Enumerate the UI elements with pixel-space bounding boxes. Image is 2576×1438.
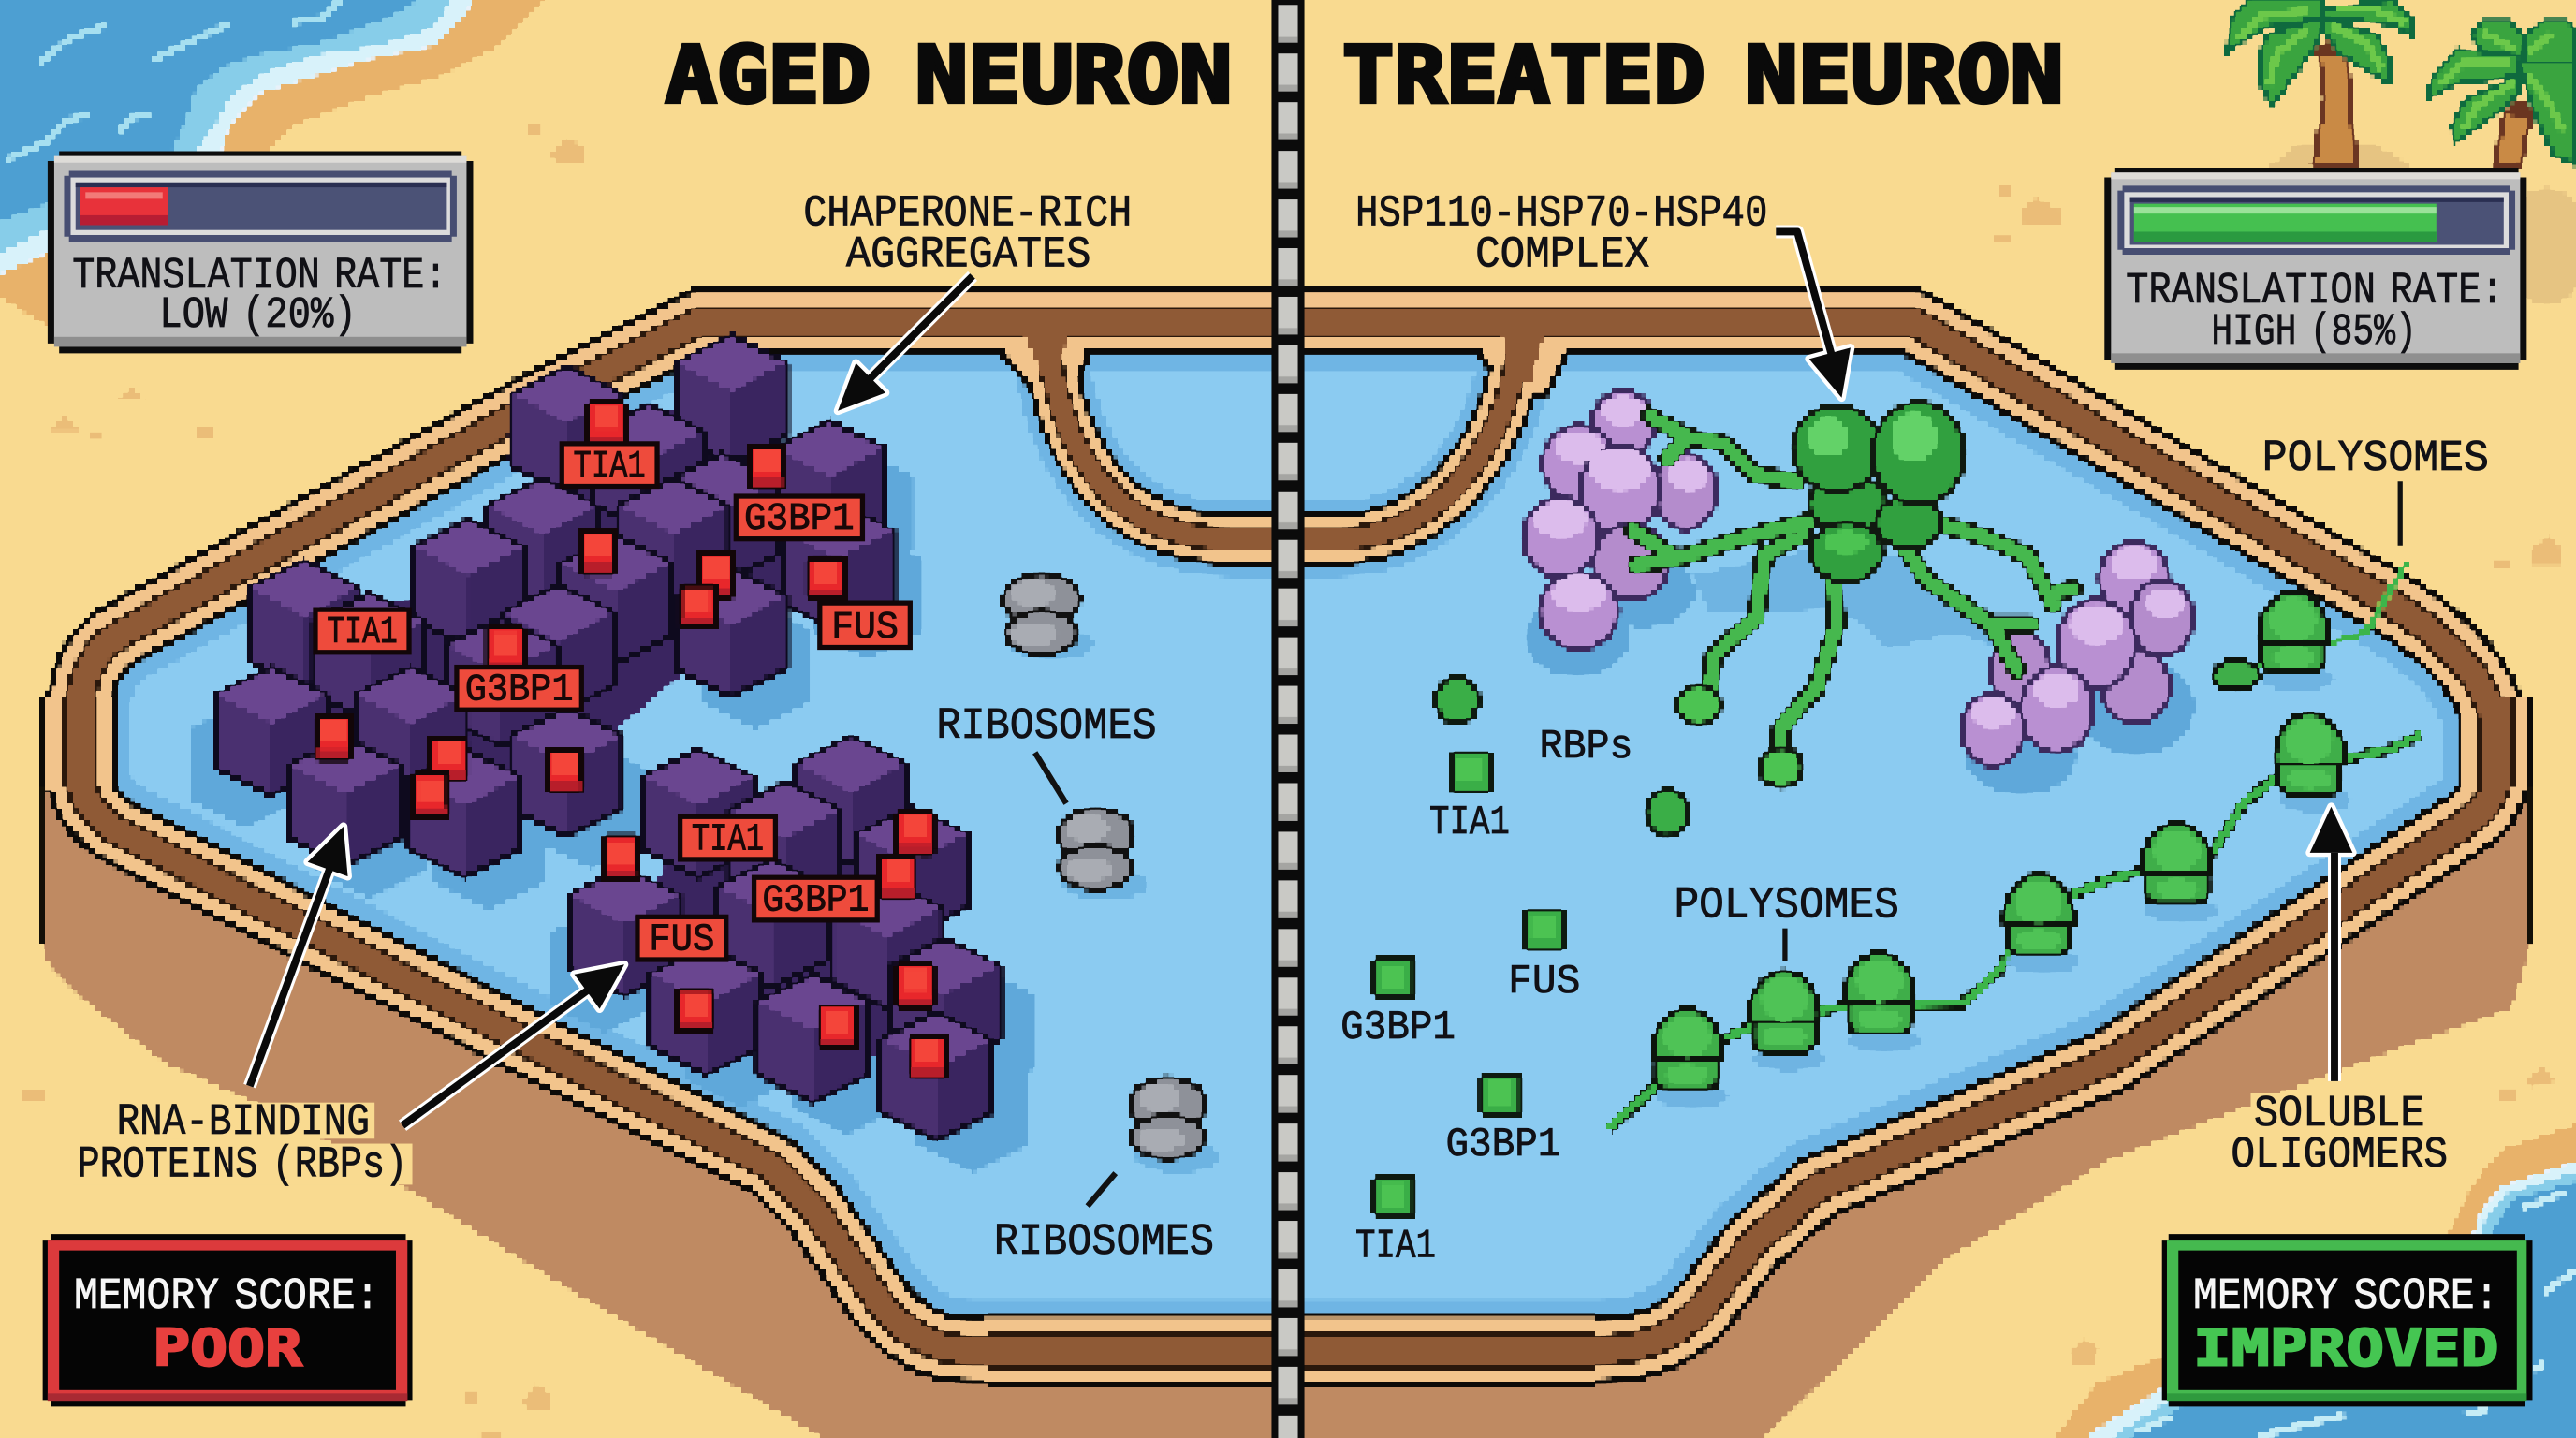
panel: memory score poor [43, 1234, 413, 1406]
label: ribosomes lower: RIBOSOMES [994, 1218, 1214, 1268]
palm tree: right [2426, 22, 2576, 166]
label: HSP complex: HSP110-HSP70-HSP40 [1355, 189, 1767, 239]
HSP110-HSP70-HSP40 complex [1633, 403, 2073, 787]
label: HSP complex [1355, 189, 1767, 280]
RBP green labels: TIA1 [1355, 1224, 1436, 1270]
palm tree: left [2228, 0, 2413, 165]
aggregate: lower cluster of purple cubes [568, 736, 1001, 1140]
extrusion side edges [41, 723, 2532, 943]
title: aged neuron: AGED [666, 29, 871, 121]
panel: translation rate high [2104, 168, 2526, 370]
label: RNA-binding proteins: RNA-BINDING [117, 1098, 370, 1148]
RBP green labels: RBPs [1540, 724, 1633, 770]
label: polysomes lower: POLYSOMES [1674, 881, 1899, 931]
title: aged neuron: NEURON [915, 29, 1232, 121]
arrow: to HSP complex [1776, 231, 1851, 398]
RBP green labels: FUS [1508, 959, 1580, 1005]
red protein labels: TIA1 [692, 818, 764, 861]
label: soluble oligomers: OLIGOMERS [2231, 1131, 2448, 1181]
panel: translation rate low: TRANSLATION RATE: [72, 252, 446, 301]
trapped red RBP blocks [315, 403, 946, 1078]
label: RNA-binding proteins [72, 1098, 413, 1191]
title: treated neuron [1342, 29, 2063, 121]
red protein labels: G3BP1 [465, 669, 574, 712]
arrow: RBP to lower cluster [402, 964, 624, 1125]
panel: memory score improved: IMPROVED [2193, 1318, 2499, 1377]
label: ribosomes upper [936, 702, 1157, 803]
membrane wall [80, 320, 2496, 1351]
RBP green labels [1340, 724, 1633, 1270]
RBP green labels: G3BP1 [1340, 1005, 1456, 1051]
arrow: to aggregates [838, 276, 973, 411]
label: chaperone-rich aggregates: AGGREGATES [846, 230, 1090, 280]
red protein labels: G3BP1 [762, 879, 869, 922]
RBP green labels: TIA1 [1429, 800, 1510, 846]
label: ribosomes upper: RIBOSOMES [936, 702, 1157, 752]
label: chaperone-rich aggregates: CHAPERONE-RICH [803, 189, 1132, 239]
panel: memory score poor: POOR [153, 1318, 302, 1377]
purple aggregates being dissolved: left [1523, 391, 2195, 795]
red protein labels: G3BP1 [744, 498, 855, 541]
panel: memory score poor: MEMORY SCORE: [74, 1272, 379, 1322]
polysome strand: long chain [1610, 713, 2422, 1129]
soluble RBP squares [1375, 677, 1689, 1216]
center divider [1271, 0, 1305, 1438]
arrow: RBP to upper cluster [250, 827, 348, 1086]
ocean: top-left [0, 0, 546, 329]
panel: memory score improved [2162, 1234, 2532, 1406]
title: aged neuron [666, 29, 1232, 121]
label: polysomes upper: POLYSOMES [2262, 434, 2489, 484]
arrow: to soluble oligomers [2310, 807, 2352, 1081]
label: soluble oligomers: SOLUBLE [2254, 1090, 2425, 1139]
title: treated neuron: NEURON [1745, 29, 2063, 121]
red protein labels [315, 444, 910, 961]
ocean: bottom-right [2054, 1123, 2576, 1438]
label: ribosomes lower [994, 1173, 1214, 1268]
label: soluble oligomers [2228, 1090, 2452, 1181]
aggregate shadows [191, 448, 1036, 1173]
title: treated neuron: TREATED [1342, 29, 1705, 121]
purple aggregates being dissolved: right [1962, 542, 2193, 766]
panel: translation rate high: HIGH (85%) [2211, 308, 2417, 358]
red protein labels: TIA1 [574, 446, 646, 489]
membrane inner shade [80, 320, 2496, 1351]
cell base: 3D extrusion under the membrane [41, 723, 2532, 1438]
red protein labels: FUS [831, 607, 899, 650]
label: chaperone-rich aggregates [803, 189, 1132, 280]
panel: translation rate low [48, 151, 473, 353]
ribosomes: gray blobs [1003, 574, 1221, 1173]
neuron cytoplasm [80, 322, 2496, 1351]
red protein labels: TIA1 [327, 611, 398, 654]
panel: translation rate low: LOW (20%) [159, 291, 357, 341]
aggregate: upper cluster of purple cubes [215, 335, 894, 877]
RBP green labels: G3BP1 [1445, 1122, 1560, 1168]
label: HSP complex: COMPLEX [1475, 230, 1649, 280]
palm shadows on sand [2267, 143, 2576, 305]
polysome strand: upper right [2213, 562, 2407, 692]
panel: translation rate high: TRANSLATION RATE: [2126, 267, 2504, 316]
panel: memory score improved: MEMORY SCORE: [2193, 1272, 2499, 1322]
label: RNA-binding proteins: PROTEINS (RBPs) [77, 1141, 407, 1191]
red protein labels: FUS [649, 918, 714, 961]
